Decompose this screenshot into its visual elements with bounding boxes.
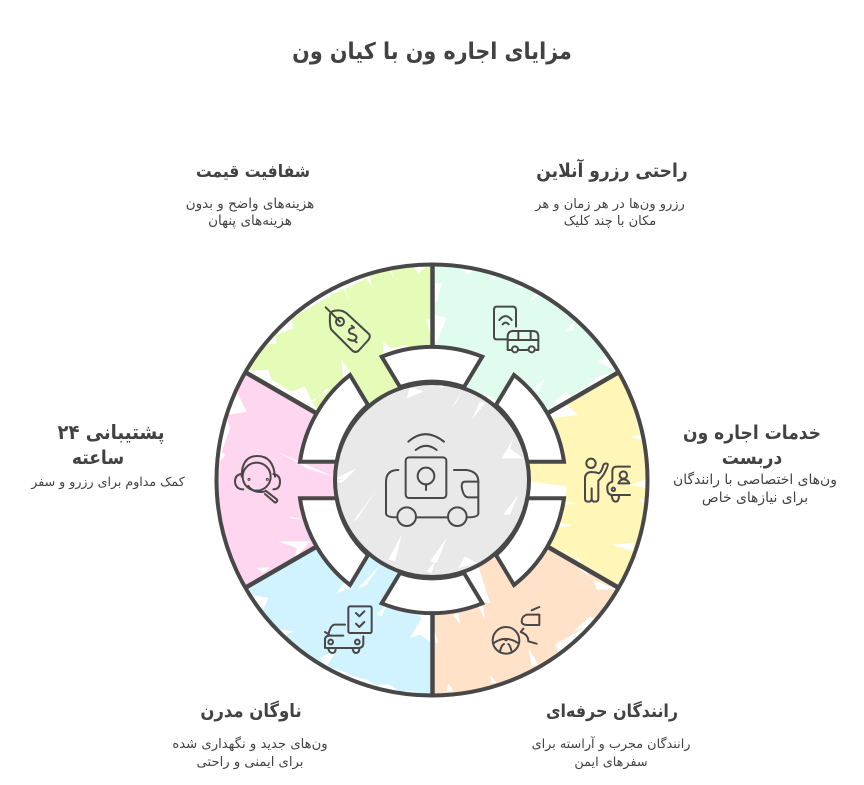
white segment: bottom	[382, 573, 482, 613]
centre disc outline	[335, 383, 529, 577]
description: مکان با چند کلیک	[564, 214, 656, 229]
heading: ناوگان مدرن	[200, 700, 302, 722]
sketch gaps: lower right	[430, 480, 647, 708]
description: سفرهای ایمن	[574, 755, 648, 770]
heading: پشتیبانی ۲۴	[57, 420, 165, 445]
heading: رانندگان حرفه‌ای	[546, 700, 678, 722]
description: رزرو ون‌ها در هر زمان و هر	[534, 197, 685, 212]
sector: support	[217, 372, 432, 588]
heading: ساعته	[72, 447, 124, 469]
description: رانندگان مجرب و آراسته برای	[532, 736, 690, 752]
sketch gaps: upper left	[210, 255, 432, 480]
white segment: lower left	[300, 498, 368, 585]
outer ring	[216, 264, 648, 696]
title: مزایای اجاره ون با کیان ون	[292, 39, 572, 65]
description: برای نیازهای خاص	[702, 490, 808, 506]
sector: charter service	[432, 372, 647, 588]
white segment: top	[382, 347, 482, 387]
heading: دربست	[722, 447, 782, 469]
heading: خدمات اجاره ون	[683, 422, 821, 444]
panel: support	[30, 420, 185, 490]
sketch gaps: lower left	[210, 478, 435, 695]
icon: car with checklist	[325, 606, 372, 653]
panel: online booking	[534, 158, 688, 229]
white segment: upper left	[300, 375, 368, 462]
icon: van with lock and signal	[386, 434, 478, 526]
sector: online booking	[432, 265, 618, 480]
spokes	[246, 265, 618, 695]
sector: professional drivers	[432, 480, 618, 695]
sector: price transparency	[246, 265, 432, 480]
icon: steering wheel and mirror	[493, 607, 539, 654]
description: ون‌های اختصاصی با رانندگان	[673, 471, 837, 488]
description: هزینه‌های پنهان	[208, 213, 292, 229]
description: کمک مداوم برای رزرو و سفر	[30, 474, 185, 490]
description: ون‌های جدید و نگهداری شده	[172, 736, 328, 752]
description: هزینه‌های واضح و بدون	[186, 196, 314, 212]
icon: price tag	[326, 307, 370, 352]
icon: phone and minibus	[494, 307, 538, 352]
sector: modern fleet	[246, 480, 432, 695]
heading: راحتی رزرو آنلاین	[536, 158, 688, 182]
heading: شفافیت قیمت	[196, 162, 310, 182]
panel: professional drivers	[532, 700, 690, 770]
icon: person hailing driver	[585, 459, 630, 502]
panel: modern fleet	[172, 700, 328, 770]
sketch gaps: upper right	[435, 270, 657, 458]
panel: charter service	[673, 422, 837, 506]
white segment: upper right	[496, 375, 564, 462]
icon: headset agent	[235, 456, 280, 503]
description: برای ایمنی و راحتی	[197, 755, 303, 770]
wheel diagram	[210, 255, 657, 708]
panel: price transparency	[186, 162, 314, 229]
centre disc	[335, 383, 529, 577]
white segment: lower right	[496, 498, 564, 585]
